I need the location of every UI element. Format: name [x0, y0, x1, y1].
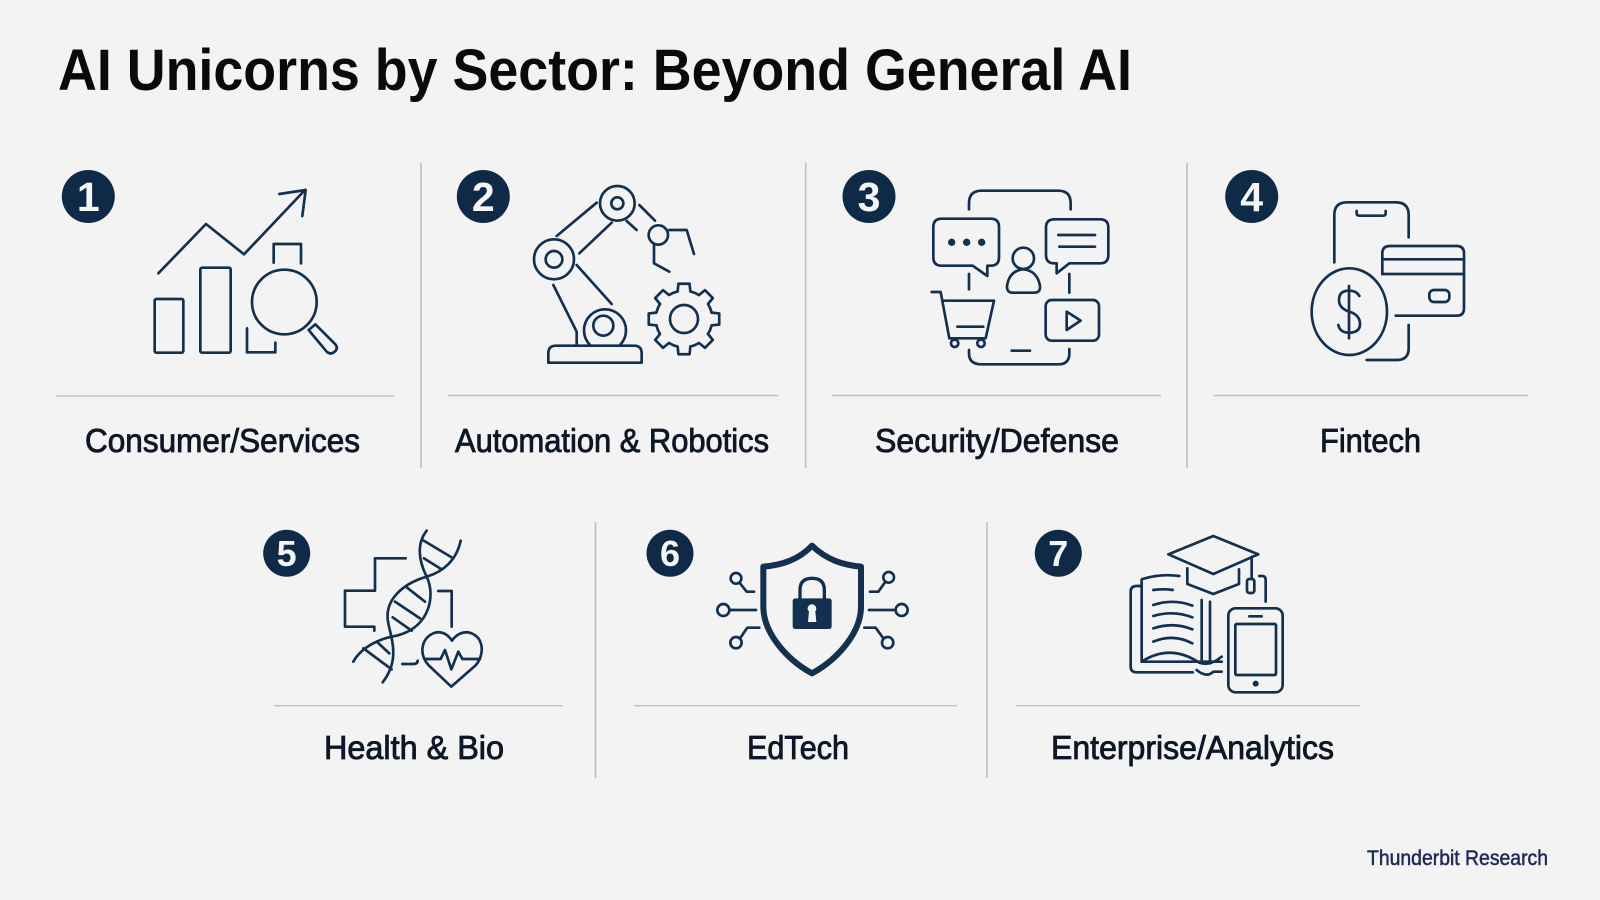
source credit: Thunderbit Research	[1367, 847, 1548, 870]
icon: phone with chat bubbles, person, cart and video	[932, 191, 1108, 364]
icon: book, graduation cap and tablet	[1131, 536, 1283, 692]
title: AI Unicorns by Sector: Beyond General AI	[58, 38, 1132, 103]
panel: Fintech	[1214, 170, 1528, 459]
number badge 4: 4	[1240, 174, 1263, 220]
label: Consumer/Services	[85, 422, 360, 459]
panel: Automation & Robotics	[448, 170, 778, 459]
panel: Enterprise/Analytics	[1016, 530, 1360, 766]
number badge 4	[1225, 170, 1278, 223]
number badge 6: 6	[660, 533, 680, 574]
number badge 1: 1	[77, 174, 100, 220]
number badge 3: 3	[858, 174, 880, 220]
number badge 5	[263, 530, 310, 577]
number badge 6	[646, 530, 694, 577]
number badge 2: 2	[472, 174, 495, 220]
panel: Health & Bio	[263, 530, 563, 766]
panel: Consumer/Services	[56, 170, 394, 459]
icon: shield with padlock and circuit nodes	[717, 546, 908, 673]
label: Fintech	[1320, 422, 1421, 459]
number badge 7	[1035, 530, 1082, 577]
icon: phone, credit card and dollar coin	[1312, 202, 1464, 360]
panel: Security/Defense	[832, 170, 1161, 459]
number badge 3	[842, 170, 896, 223]
number badge 1	[62, 170, 115, 223]
label: Security/Defense	[875, 422, 1119, 459]
number badge 7: 7	[1048, 533, 1068, 574]
icon: robot arm and gear	[534, 186, 720, 363]
icon: DNA helix, medical cross and heart	[345, 531, 482, 687]
panel: EdTech	[634, 530, 957, 766]
label: Automation & Robotics	[455, 422, 769, 459]
icon: bar chart with trend arrow and magnifier	[155, 190, 337, 353]
number badge 2	[457, 170, 510, 223]
label: EdTech	[747, 729, 849, 766]
label: Enterprise/Analytics	[1051, 729, 1334, 766]
number badge 5: 5	[277, 533, 297, 574]
label: Health & Bio	[324, 729, 504, 766]
